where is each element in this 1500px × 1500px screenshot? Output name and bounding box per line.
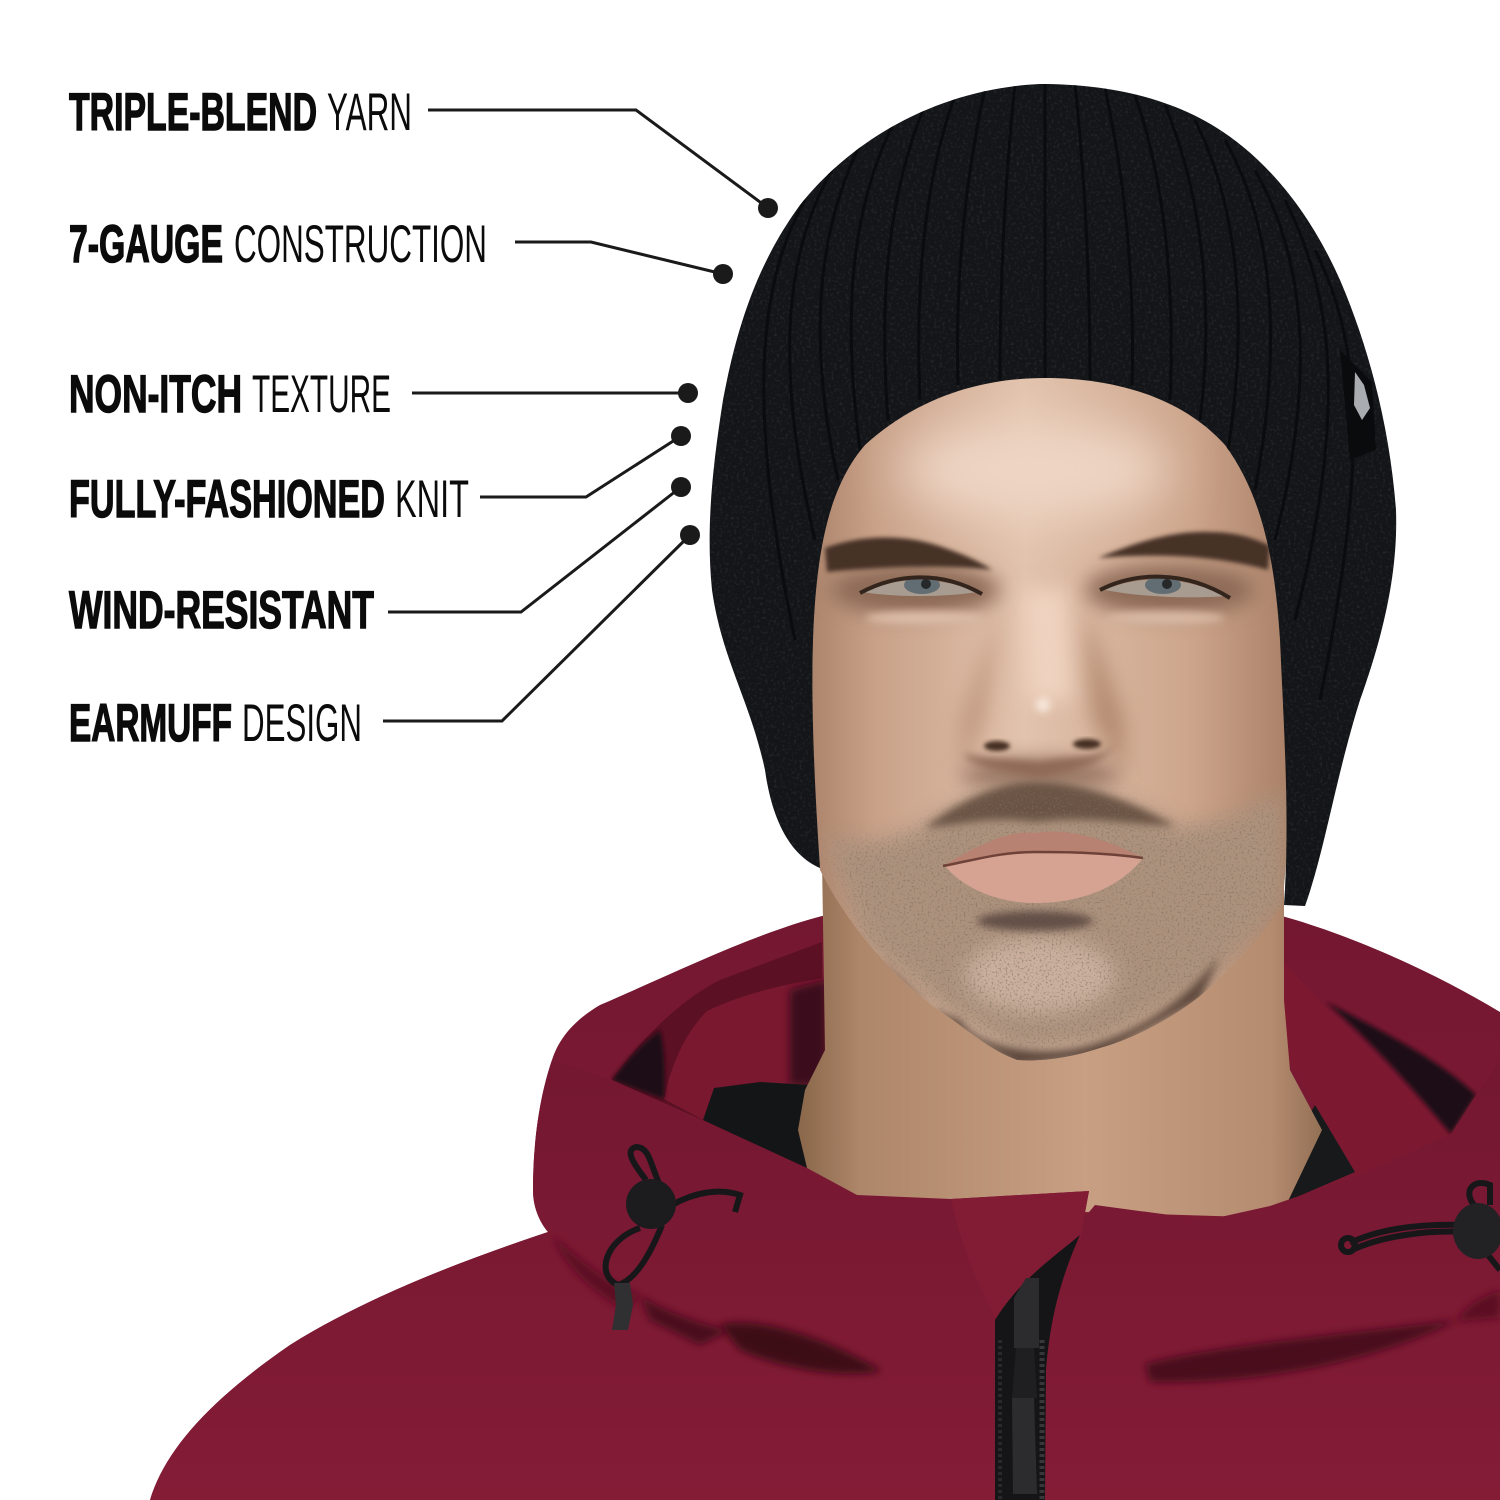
brows xyxy=(825,537,992,572)
under-lip shadow xyxy=(977,911,1093,931)
hood lining shade xyxy=(790,980,826,1085)
hoodie shadows and folds xyxy=(552,1235,1500,1382)
leader line: wind-resistant xyxy=(388,477,691,612)
nose side shadows xyxy=(1085,610,1125,775)
label: non-itch texture: NON-ITCH xyxy=(69,365,242,424)
forehead highlight xyxy=(900,420,1170,520)
label: fully-fashioned knit: KNIT xyxy=(395,470,469,529)
leader line: fully-fashioned knit xyxy=(480,426,691,497)
leader line: non-itch texture xyxy=(412,383,698,403)
lips xyxy=(943,831,1143,903)
neck xyxy=(798,860,1322,1218)
collar and hoodie front xyxy=(150,1060,1500,1500)
hood interior left xyxy=(612,942,822,1170)
black inner left xyxy=(612,1030,665,1099)
label: earmuff design: DESIGN xyxy=(242,694,362,753)
hat brand patch xyxy=(1340,350,1376,460)
leader line: triple-blend yarn xyxy=(428,110,778,218)
hood lining left xyxy=(664,978,822,1164)
label: wind-resistant: WIND-RESISTANT xyxy=(69,581,374,640)
chin highlight xyxy=(965,937,1115,1013)
hoodie silhouette xyxy=(150,916,1500,1500)
leader line: earmuff design xyxy=(383,525,700,721)
beanie xyxy=(700,80,1410,910)
right toggle and cord xyxy=(1341,1183,1500,1270)
label: 7-gauge construction: 7-GAUGE xyxy=(69,215,223,274)
right eye xyxy=(1105,579,1226,597)
beard tone xyxy=(838,791,1286,1052)
hood lining right xyxy=(1282,960,1451,1176)
label: non-itch texture: TEXTURE xyxy=(252,365,391,424)
jaw shadow xyxy=(880,955,1220,1066)
under-eye bags xyxy=(865,611,985,625)
eye socket shadows xyxy=(830,564,1000,616)
black undershirt right xyxy=(1262,1105,1355,1212)
zipper flap xyxy=(951,1191,1089,1318)
black undershirt left xyxy=(703,1082,810,1170)
label: 7-gauge construction xyxy=(69,215,487,274)
leader line: 7-gauge construction xyxy=(515,242,733,284)
zipper xyxy=(995,1235,1080,1500)
label: earmuff design: EARMUFF xyxy=(69,694,232,753)
label: 7-gauge construction: CONSTRUCTION xyxy=(234,215,487,274)
nose xyxy=(963,739,1117,778)
label: fully-fashioned knit: FULLY-FASHIONED xyxy=(69,470,385,529)
label: triple-blend yarn: TRIPLE-BLEND xyxy=(69,83,317,142)
moustache xyxy=(925,782,1175,828)
under-nose shadow xyxy=(960,759,1120,791)
black inner right xyxy=(1326,1002,1476,1134)
nose bridge highlight xyxy=(1022,590,1072,700)
left toggle and cord xyxy=(606,1147,740,1330)
left eye xyxy=(862,580,978,596)
face xyxy=(808,370,1290,1060)
beard speckle xyxy=(828,788,1286,1050)
label: triple-blend yarn: YARN xyxy=(327,83,412,142)
